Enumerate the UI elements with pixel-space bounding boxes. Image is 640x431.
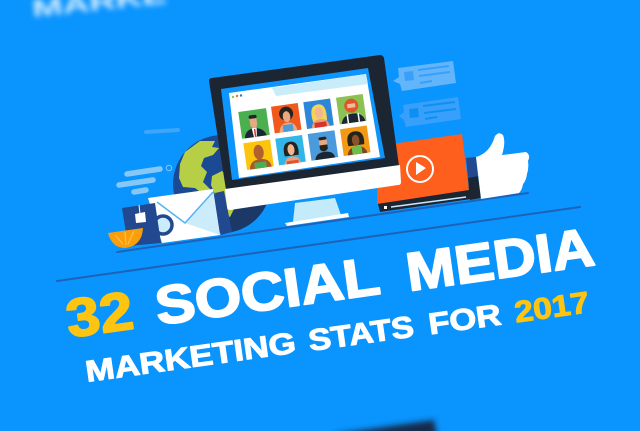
blurred monitor edge at bottom: [335, 420, 437, 431]
portrait 8: [340, 126, 370, 156]
browser window: [229, 74, 380, 178]
portrait 2: [271, 103, 301, 133]
portrait 7: [308, 130, 338, 161]
icon: thumbs up: [466, 133, 529, 200]
illustration: [57, 55, 580, 281]
monitor frame: [209, 55, 399, 190]
icon: envelope: [148, 189, 232, 243]
icon: monitor: [209, 55, 401, 226]
title line 2: MARKETING: [83, 327, 298, 389]
portrait 3: [303, 99, 334, 129]
title line 2: FOR: [426, 299, 504, 341]
icon: tea mug: [122, 203, 172, 246]
screen: [221, 68, 385, 180]
icon: speech bubble 1: [393, 61, 456, 91]
title line 1: [62, 217, 598, 349]
icon: orange slice: [108, 228, 143, 248]
title line 2: [83, 286, 591, 389]
icon: globe: [173, 135, 271, 233]
icon: wind lines: [119, 130, 178, 192]
portrait 5: [243, 140, 274, 170]
title line 2: STATS: [306, 311, 416, 358]
portrait 1: [238, 108, 270, 139]
title line 1: 32: [62, 281, 137, 349]
portrait 4: [336, 94, 366, 124]
icon: speech bubble 2: [399, 97, 461, 127]
monitor chin: [225, 165, 401, 210]
title: [62, 217, 598, 389]
ground lines: [57, 193, 580, 281]
portrait 6: [275, 135, 306, 165]
monitor stand: [285, 198, 349, 226]
title line 1: MEDIA: [402, 217, 598, 303]
icon: video player: [377, 134, 471, 212]
title line 2: 2017: [512, 286, 591, 329]
title line 1: SOCIAL: [151, 246, 383, 337]
